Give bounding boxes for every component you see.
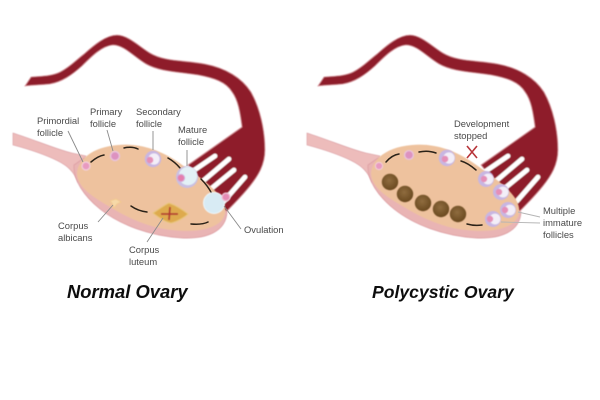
follicles	[375, 150, 516, 227]
label: multiple immature follicles: immature	[543, 217, 582, 228]
icon: development stopped X	[467, 146, 477, 158]
ovulating follicle	[204, 192, 230, 214]
label: development stopped: stopped	[454, 130, 487, 141]
corpus albicans	[110, 199, 121, 208]
ovary body	[74, 145, 227, 238]
label: corpus luteum: luteum	[129, 256, 157, 267]
title: polycystic ovary: Polycystic Ovary	[372, 282, 515, 302]
label: mature follicle: Mature	[178, 124, 207, 135]
follicles	[82, 151, 230, 223]
maturation arrows	[386, 151, 482, 225]
label: ovulation: Ovulation	[244, 224, 284, 235]
leader lines	[501, 212, 540, 223]
label: secondary follicle: follicle	[136, 118, 162, 129]
label: corpus luteum: Corpus	[129, 244, 159, 255]
label: multiple immature follicles: follicles	[543, 229, 574, 240]
label: primary follicle: follicle	[90, 118, 116, 129]
primary follicle	[110, 152, 120, 160]
corpus luteum	[153, 203, 188, 223]
label: multiple immature follicles: Multiple	[543, 205, 575, 216]
ovary body	[368, 145, 521, 238]
label: primordial follicle: follicle	[37, 127, 63, 138]
fallopian tube	[25, 35, 265, 212]
label: secondary follicle: Secondary	[136, 106, 181, 117]
label: primary follicle: Primary	[90, 106, 122, 117]
cysts	[382, 174, 466, 222]
leader lines	[68, 130, 241, 242]
label: mature follicle: follicle	[178, 136, 204, 147]
label: development stopped: Development	[454, 118, 509, 129]
title: normal ovary: Normal Ovary	[67, 281, 188, 302]
secondary follicle	[145, 151, 161, 167]
label: corpus albicans: Corpus	[58, 220, 88, 231]
ovarian ligament	[13, 133, 86, 182]
panel: polycystic ovary	[307, 35, 582, 302]
label: primordial follicle: Primordial	[37, 115, 79, 126]
maturation arrows	[91, 147, 212, 224]
mature follicle	[176, 166, 198, 188]
ovarian ligament	[307, 133, 380, 182]
primordial follicle	[82, 162, 90, 170]
panel: normal ovary	[13, 35, 284, 302]
label: corpus albicans: albicans	[58, 232, 93, 243]
fallopian tube	[318, 35, 558, 212]
